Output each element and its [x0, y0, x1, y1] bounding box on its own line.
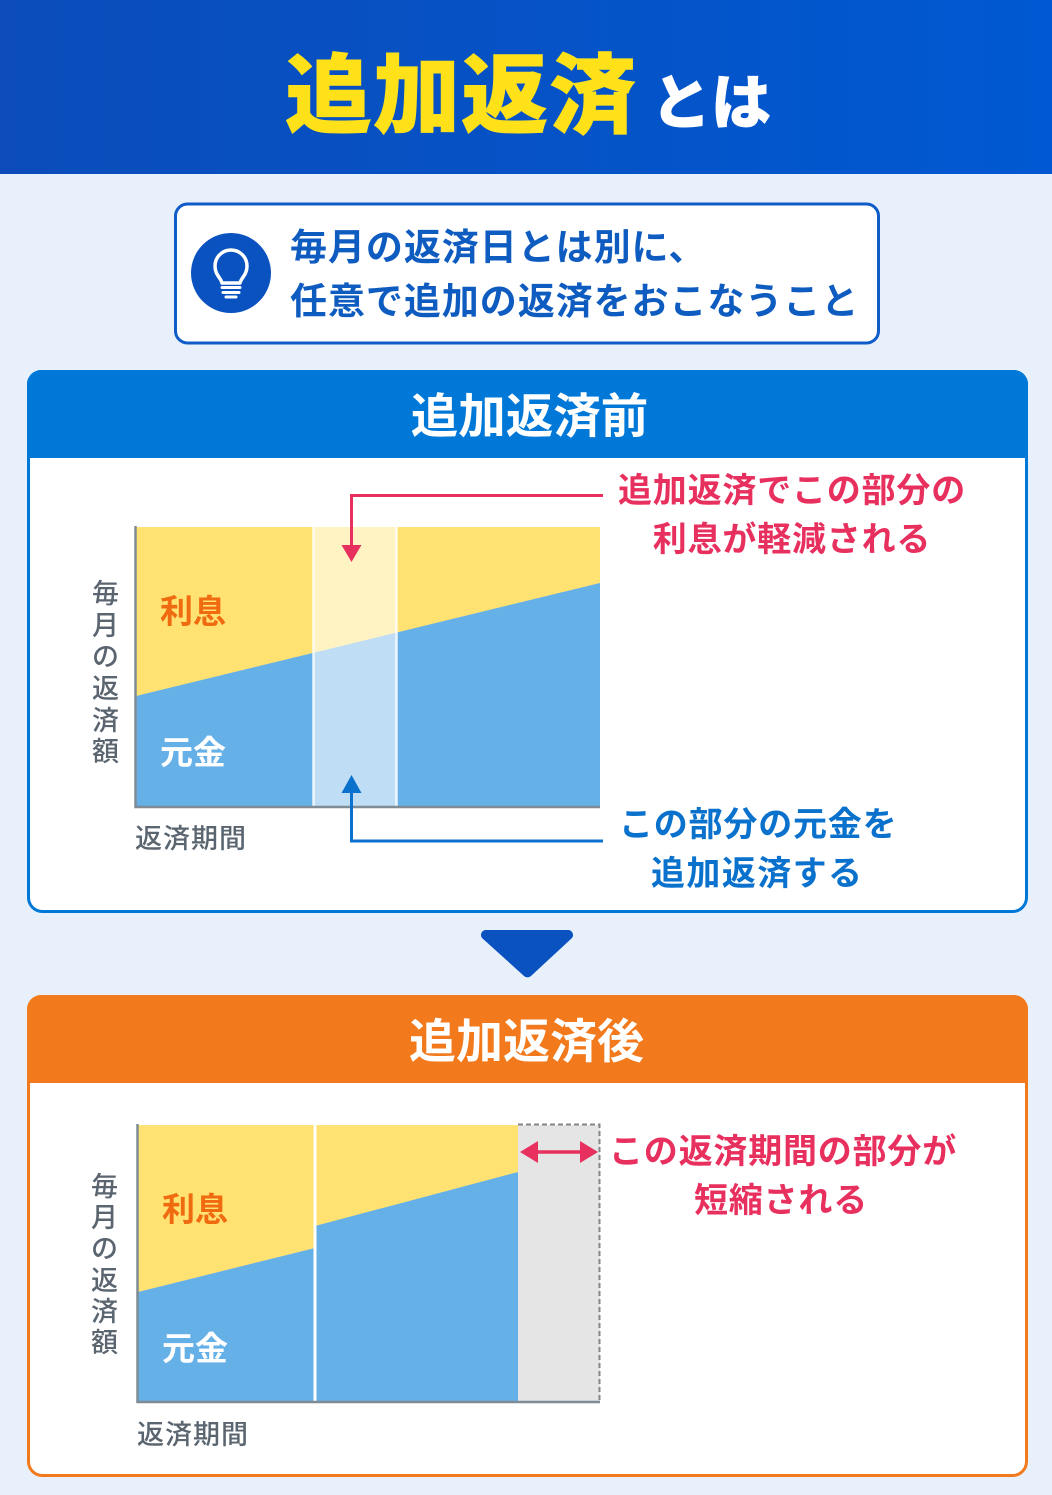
y axis label: 済 [91, 1297, 118, 1327]
y axis label: 返 [91, 1266, 118, 1296]
panel: before [27, 370, 1028, 912]
title: とは [651, 70, 771, 137]
annotation: interest: 利息が軽減される [653, 520, 931, 559]
y axis label: 返 [92, 674, 119, 704]
x axis label: 返済期間 [137, 1420, 249, 1450]
label: interest: 利息 [160, 593, 226, 630]
arrow: down [481, 930, 573, 977]
y axis label: 毎 [92, 579, 119, 609]
arrow: interest [342, 496, 603, 562]
y axis label: の [92, 642, 119, 672]
header band [0, 0, 1052, 174]
y axis label: 月 [92, 611, 119, 641]
arrow: principal [342, 775, 603, 841]
y axis label: 額 [91, 1328, 118, 1358]
label: principal: 元金 [160, 734, 226, 771]
label: interest: 利息 [162, 1191, 228, 1228]
icon: light bulb [191, 233, 271, 313]
label: principal: 元金 [162, 1330, 228, 1367]
annotation: shortened period: 短縮される [694, 1182, 868, 1220]
definition text: 毎月の返済日とは別に、 [290, 227, 706, 268]
chart: before [92, 526, 600, 854]
y axis label: 毎 [91, 1172, 118, 1202]
annotation: interest: 追加返済でこの部分の [618, 472, 966, 510]
y axis label: の [91, 1234, 118, 1264]
annotation: shortened period: この返済期間の部分が [609, 1132, 957, 1171]
heading: before: 追加返済前 [411, 391, 648, 444]
y axis label: 額 [92, 737, 119, 767]
annotation: principal: この部分の元金を [619, 806, 897, 844]
arrow: shortened period [520, 1141, 598, 1163]
y axis label: 月 [91, 1203, 118, 1233]
y axis label: 済 [92, 706, 119, 736]
x axis label: 返済期間 [135, 824, 247, 854]
chart: after [91, 1124, 600, 1450]
title: 追加返済 [285, 48, 637, 145]
panel: after [27, 995, 1028, 1476]
annotation: principal: 追加返済する [651, 855, 863, 893]
definition text: 任意で追加の返済をおこなうこと [290, 281, 859, 322]
heading: after: 追加返済後 [409, 1015, 644, 1068]
callout: definition [176, 204, 878, 343]
